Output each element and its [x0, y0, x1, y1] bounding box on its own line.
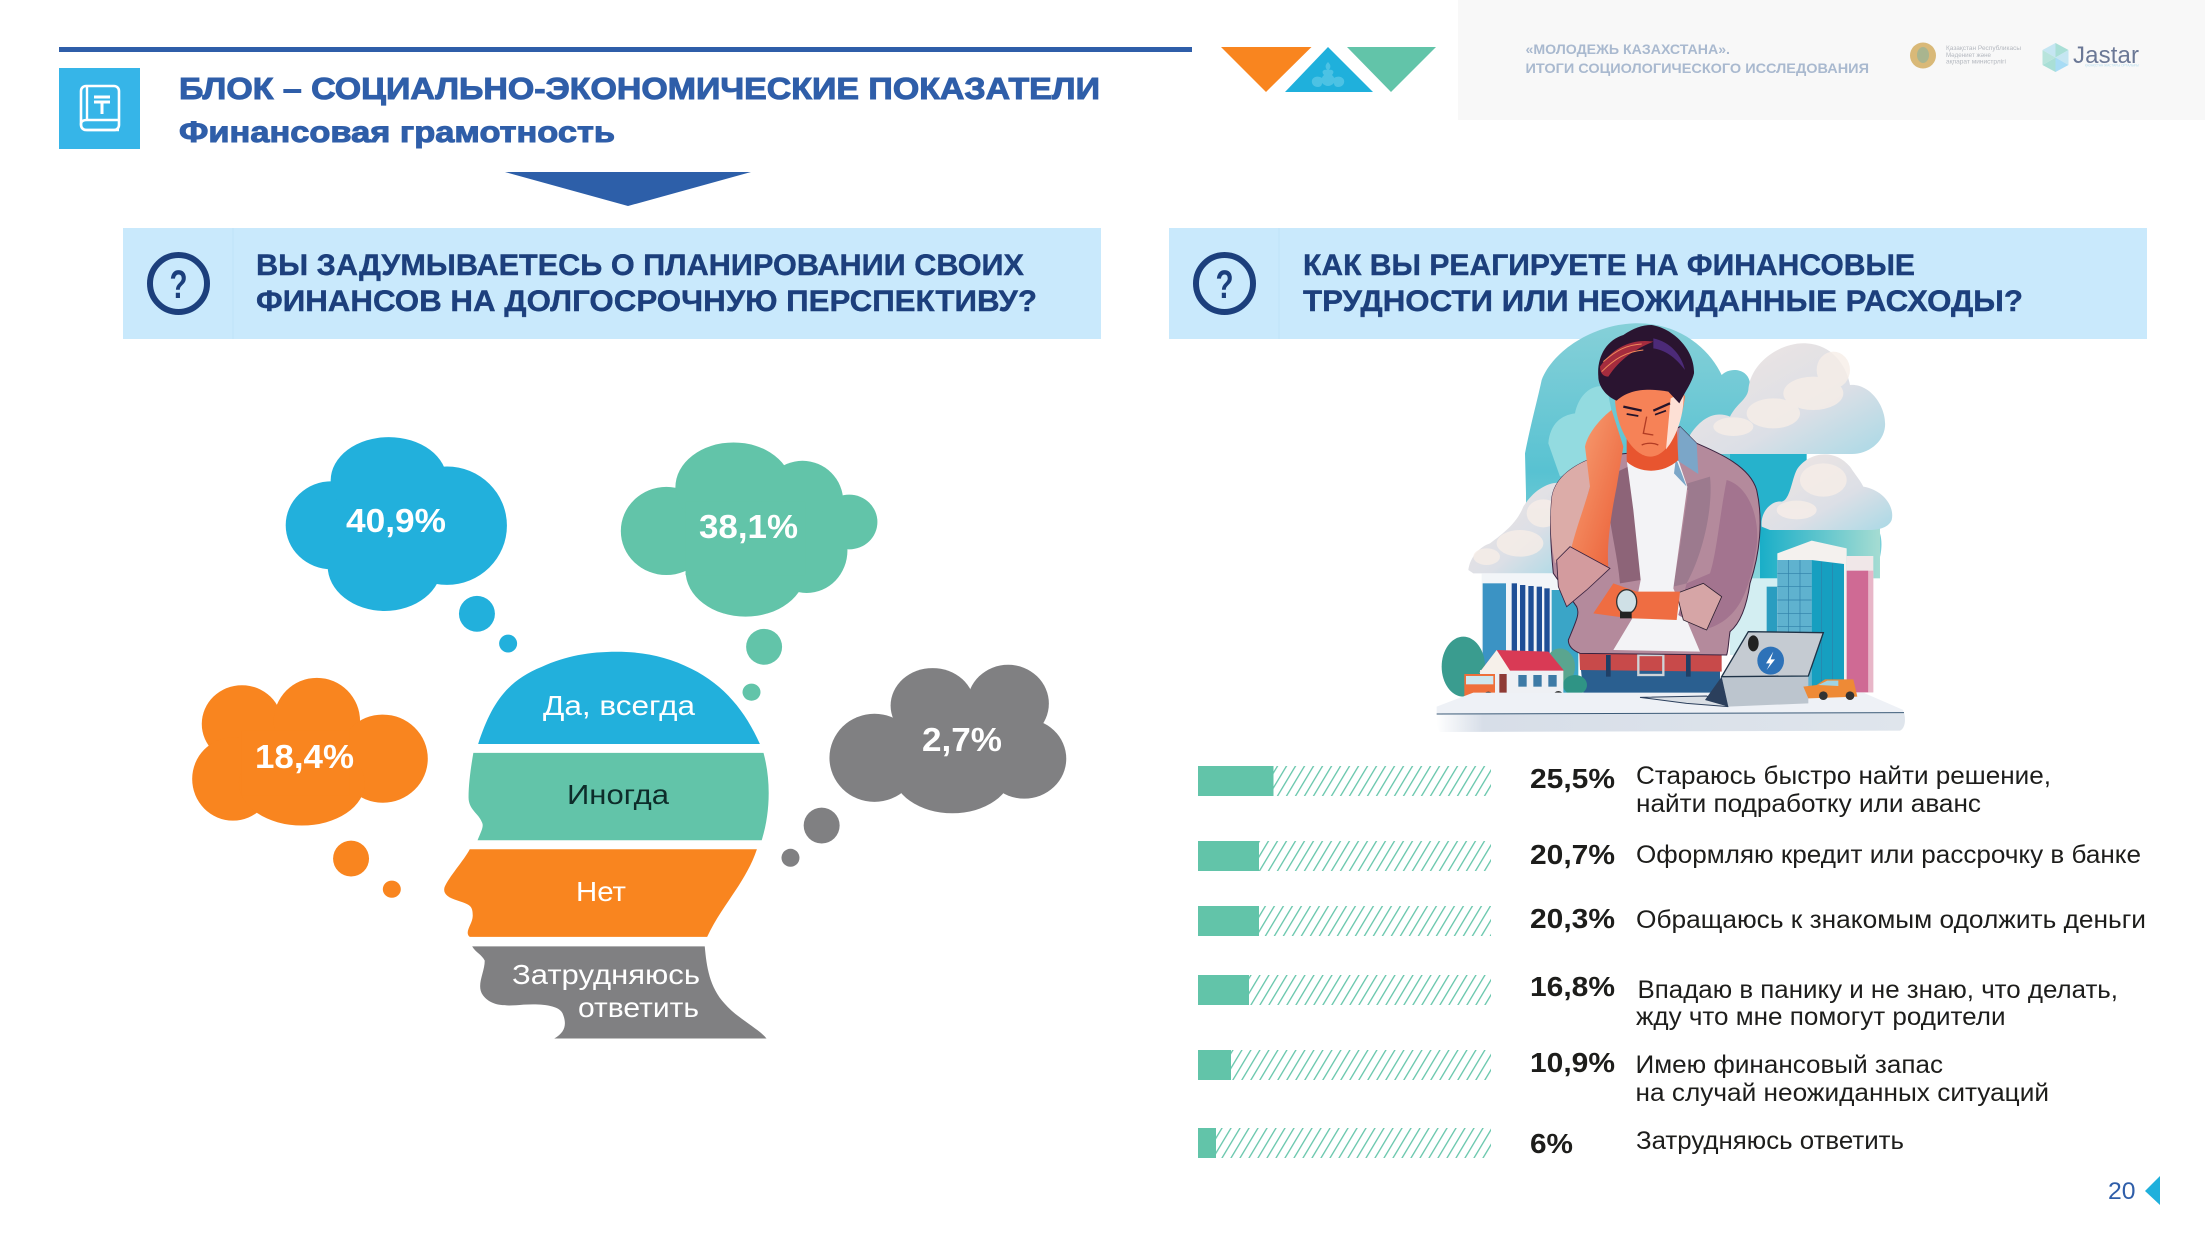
man: [1551, 325, 1760, 693]
question text: [1303, 249, 2023, 318]
facial features: [1623, 403, 1670, 411]
project caption: [1526, 41, 1869, 76]
forearm across: [1593, 583, 1680, 620]
bar row 3: [1198, 903, 2146, 936]
question text: ФИНАНСОВ НА ДОЛГОСРОЧНУЮ ПЕРСПЕКТИВУ?: [256, 285, 1037, 318]
tablet: [1640, 632, 1823, 707]
cloud: blue: [286, 437, 517, 653]
page number: 20: [2108, 1178, 2136, 1205]
bar row 5: Имею финансовый запас: [1636, 1051, 1943, 1079]
head labels: Нет: [576, 876, 626, 907]
head segment: blue: [478, 652, 760, 744]
logo: ministry emblem: Мәдениет және: [1946, 53, 1992, 59]
chart: thought clouds and head: [192, 437, 1066, 1039]
jeans and belt: [1579, 653, 1720, 693]
bar row 6: Затрудняюсь ответить: [1636, 1127, 1904, 1155]
cloud percentages: 2,7%: [922, 721, 1002, 758]
cloud: gray: [781, 665, 1066, 867]
shirt body: [1551, 427, 1760, 655]
bar row 1: 25,5%: [1530, 763, 1615, 794]
subtitle: Финансовая грамотность: [179, 116, 615, 149]
cloud percentages: 38,1%: [699, 508, 798, 545]
neck: [1627, 427, 1678, 471]
logo: ministry emblem: ақпарат министрлігі: [1946, 60, 2006, 66]
icon: question mark: [1196, 255, 1253, 312]
hair: [1598, 325, 1694, 403]
head segment: gray: [472, 946, 767, 1039]
bar row 5: на случай неожиданных ситуаций: [1636, 1079, 2049, 1107]
t-shirt: [1613, 460, 1700, 652]
question text: ТРУДНОСТИ ИЛИ НЕОЖИДАННЫЕ РАСХОДЫ?: [1303, 285, 2023, 318]
bar row 1: Стараюсь быстро найти решение,: [1636, 762, 2051, 790]
bar row 2: [1198, 839, 2141, 871]
bar row 4: жду что мне помогут родители: [1636, 1003, 2006, 1031]
head labels: ответить: [578, 992, 699, 1023]
house and tree: [1442, 637, 1587, 702]
question text: [256, 249, 1037, 318]
project caption: «МОЛОДЕЖЬ КАЗАХСТАНА».: [1526, 41, 1730, 57]
icon: question mark: ?: [170, 263, 188, 307]
panel: project info: [1458, 0, 2205, 120]
bar row 5: [1198, 1047, 2049, 1107]
icon: question mark: ?: [1216, 263, 1234, 307]
logo: Jastar: Jastar: [2073, 42, 2139, 69]
head labels: Иногда: [567, 779, 669, 810]
question text: ВЫ ЗАДУМЫВАЕТЕСЬ О ПЛАНИРОВАНИИ СВОИХ: [256, 249, 1024, 282]
face: [1615, 377, 1685, 457]
title: БЛОК – СОЦИАЛЬНО-ЭКОНОМИЧЕСКИЕ ПОКАЗАТЕЛИ: [179, 71, 1100, 106]
bar row 4: 16,8%: [1530, 971, 1615, 1002]
raised forearm and hand: [1572, 410, 1623, 580]
bar row 4: [1198, 971, 2118, 1031]
clouds: [1468, 343, 1892, 573]
bar row 3: 20,3%: [1530, 903, 1615, 934]
project caption: ИТОГИ СОЦИОЛОГИЧЕСКОГО ИССЛЕДОВАНИЯ: [1526, 60, 1869, 76]
question text: КАК ВЫ РЕАГИРУЕТЕ НА ФИНАНСОВЫЕ: [1303, 249, 1915, 282]
cloud percentages: 18,4%: [255, 738, 354, 775]
cloud: orange: [192, 678, 428, 898]
rolled cuff: [1557, 547, 1610, 607]
watch: [1617, 590, 1637, 614]
bar row 1: [1198, 762, 2051, 818]
logo: ministry emblem: Қазақстан Республикасы: [1946, 46, 2021, 52]
sky backdrop: [1525, 323, 1881, 593]
panel: question 2: [1169, 228, 2147, 339]
illustration: worried young man: [1436, 323, 1905, 732]
bar row 1: найти подработку или аванс: [1636, 790, 1981, 818]
head labels: [512, 690, 700, 1023]
head segment: orange: [444, 849, 757, 937]
arrow: down triangle: [505, 172, 751, 206]
bar row 6: [1198, 1127, 1904, 1159]
buildings: [1482, 541, 1873, 697]
decorative triangles logo: [1221, 47, 1436, 92]
cloud percentages: [255, 502, 1002, 775]
logo: ministry emblem: [1910, 42, 2021, 68]
bar row 2: 20,7%: [1530, 839, 1615, 870]
car: [1803, 679, 1857, 700]
cloud percentages: 40,9%: [346, 502, 446, 539]
page number: [2108, 1176, 2160, 1205]
head labels: Да, всегда: [543, 690, 695, 721]
bar row 3: Обращаюсь к знакомым одолжить деньги: [1636, 906, 2146, 934]
bar row 5: 10,9%: [1530, 1047, 1615, 1078]
table: [1436, 693, 1905, 732]
bar row 2: Оформляю кредит или рассрочку в банке: [1636, 841, 2141, 869]
bar chart: reactions to difficulties: [1198, 762, 2146, 1159]
cloud: green: [621, 442, 877, 701]
head labels: Затрудняюсь: [512, 959, 700, 990]
logo: Jastar: [2042, 42, 2139, 72]
bar row 6: 6%: [1530, 1128, 1573, 1159]
head segment: green: [469, 753, 769, 840]
logo: Jastar: ҚАЗАҚСТАН ЖАСТАРЫ ОРТАЛЫҒЫ: [2085, 64, 2139, 68]
bar row 4: Впадаю в панику и не знаю, что делать,: [1638, 976, 2118, 1004]
header rule: [59, 47, 1192, 52]
right sleeve: [1678, 480, 1757, 630]
icon: book: [59, 68, 140, 149]
panel: question 1: [123, 228, 1101, 339]
icon: question mark: [150, 255, 207, 312]
collar: [1674, 427, 1698, 487]
